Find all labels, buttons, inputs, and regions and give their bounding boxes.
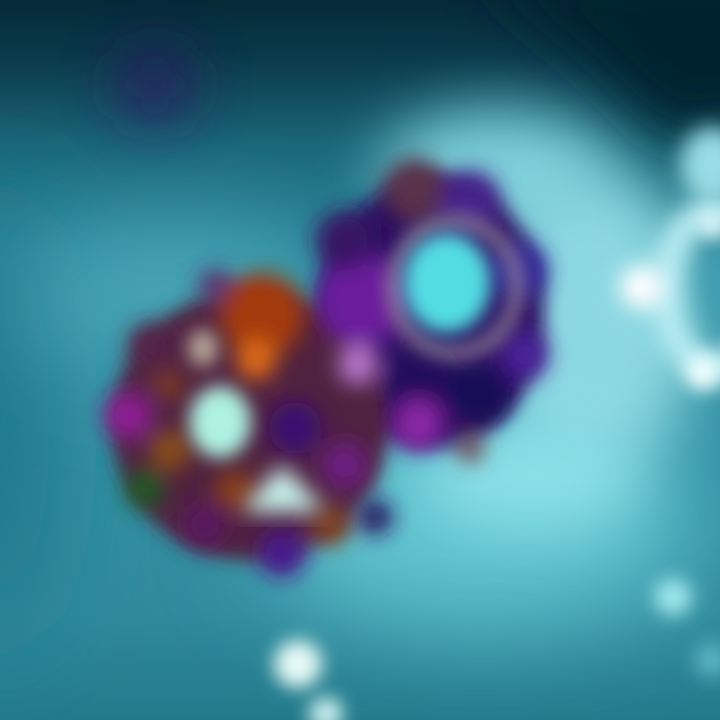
small glowing dots xyxy=(274,578,720,720)
dark corner top right xyxy=(470,0,720,140)
pale cyan cloud behind cluster xyxy=(380,110,720,530)
background glow layers xyxy=(0,200,700,640)
cyan window xyxy=(403,233,491,333)
molecular cluster xyxy=(104,158,549,577)
pale window bottom xyxy=(248,470,318,508)
cluster base shadow xyxy=(112,177,544,560)
bright ring at right edge xyxy=(620,212,720,389)
dark purple haze top left xyxy=(113,47,197,123)
pale window upper left xyxy=(188,329,218,367)
lower-left lobe facets xyxy=(104,269,393,577)
cyan window ring xyxy=(393,221,517,353)
mint window xyxy=(189,386,251,458)
upper-right lobe facets xyxy=(315,158,549,462)
